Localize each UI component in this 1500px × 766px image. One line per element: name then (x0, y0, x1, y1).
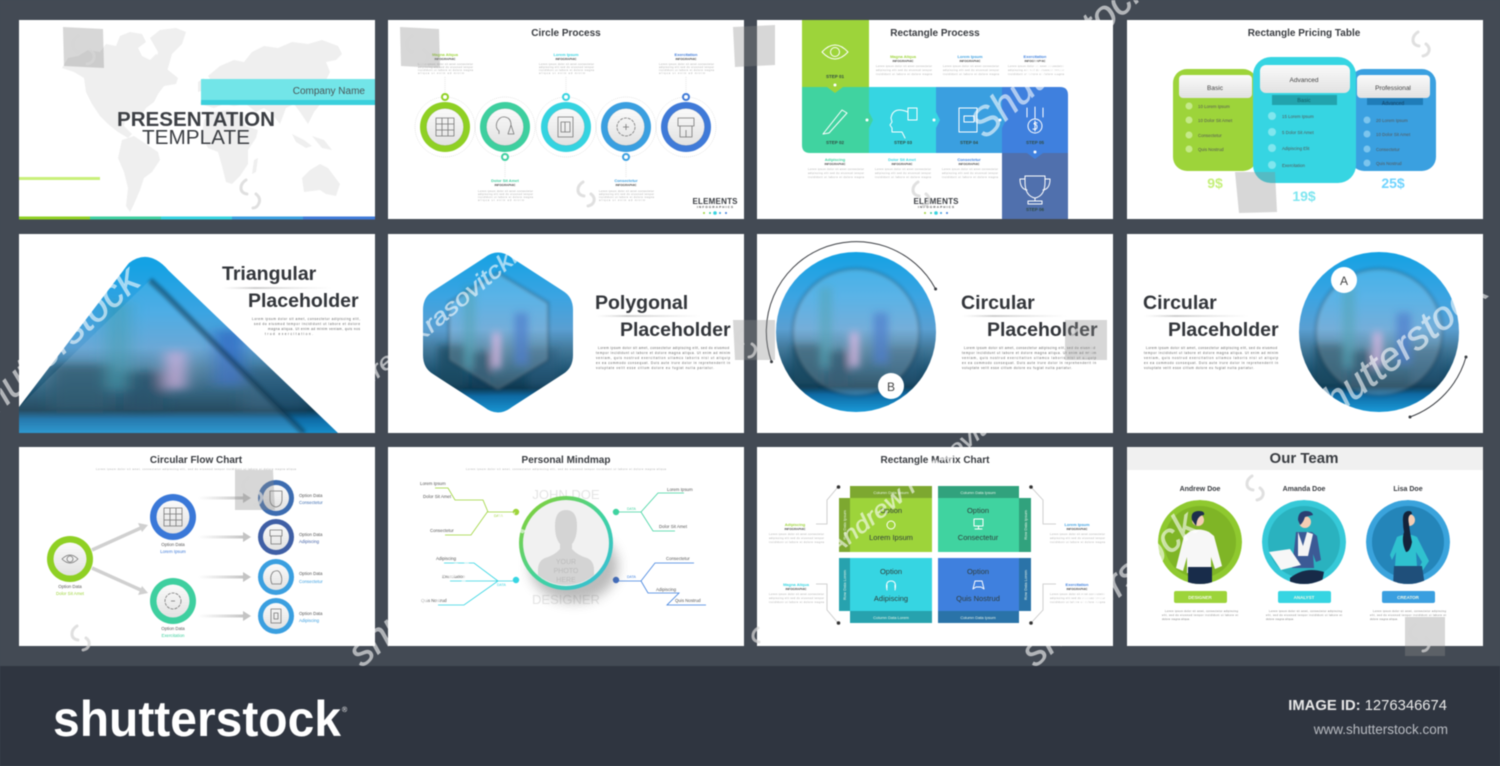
side captions (769, 522, 1106, 604)
badge B: B (887, 380, 895, 394)
bottom captions: incididunt ut labore et dolore magna (875, 175, 932, 179)
heading: Circular (961, 292, 1035, 314)
member names: Andrew Doe (1180, 486, 1221, 493)
body text: ex ea commodo consequat. Duis aute irure dolor in reprehenderit in (1144, 361, 1278, 365)
node captions: Consectetur (299, 579, 323, 584)
badge A: A (1340, 274, 1348, 288)
arc arrow (766, 242, 937, 363)
photo circle: PHOTO (554, 568, 579, 575)
matrix tabs: Row Data Ipsum (842, 510, 847, 540)
bottom captions: adipiscing elit sed do eiusmod tempor (942, 171, 998, 175)
branch labels: Adipiscing (436, 556, 457, 561)
watermark squares (63, 25, 1445, 656)
side captions: adipiscing elit sed do eiusmod tempor (769, 596, 824, 600)
matrix tabs: Column Data Ipsum (873, 490, 909, 495)
matrix squares: Consectetur (958, 533, 999, 542)
node captions: Adipiscing (299, 539, 320, 544)
side captions: adipiscing elit sed do eiusmod tempor (1050, 596, 1105, 600)
node captions: Exercitation (162, 633, 185, 638)
bottom captions: adipiscing elit sed do eiusmod tempor (808, 171, 864, 175)
node captions: Lorem Ipsum (160, 549, 186, 554)
advanced card: Basic (1297, 98, 1311, 104)
branch labels: Quis Nostrud (675, 598, 701, 603)
top labels: Lorem ipsum dolor sit amet consectetur (418, 62, 473, 66)
professional card: 10 Dolor Sit Amet (1376, 132, 1411, 137)
bottom labels: incididunt ut labore et dolore magna (478, 195, 534, 199)
step labels: STEP 05 (1026, 140, 1044, 145)
member bios: Lorem ipsum dolor sit amet, consectetur adipiscing (1165, 609, 1239, 613)
member: Lisa (1366, 500, 1450, 586)
body text (252, 317, 360, 336)
side captions: Magna Aliqua (783, 582, 810, 587)
side captions: Lorem ipsum dolor sit amet consectetur (1050, 532, 1105, 536)
top labels: adipiscing elit sed do eiusmod tempor (539, 65, 594, 69)
matrix squares (850, 498, 1019, 611)
body text: veniam, quis nostrud exercitation ullamco laboris nisi ut aliquip (962, 356, 1096, 360)
side captions: Lorem Ipsum (1064, 522, 1090, 527)
title: PRESENTATION (117, 109, 275, 131)
member bios: dolore magna aliqua. (1266, 617, 1294, 621)
basic card: Quis Nostrud (1198, 147, 1224, 152)
body text: voluptate velit esse cillum dolore eu fugiat nulla pariatur. (596, 366, 714, 370)
node captions: Option Data (299, 611, 323, 616)
top captions: Lorem Ipsum (957, 54, 983, 59)
image id: IMAGE ID: 1276346674 (1288, 698, 1447, 714)
body text: tempor incididunt ut labore et dolore magna aliqua. Ut enim ad minim (1144, 351, 1278, 355)
panel: triangular placeholder slide (19, 234, 375, 438)
panel: rectangle pricing table slide (1127, 20, 1483, 219)
panel: rectangle matrix chart slide (757, 447, 1113, 646)
body text: Lorem ipsum dolor sit amet, consectetur adipiscing elit, sed do eiusmod (598, 346, 729, 350)
colour strip (19, 216, 375, 220)
panel: personal mindmap slide (388, 447, 744, 646)
footer logo: shutterstock (53, 691, 341, 747)
top labels: Exercitation (675, 52, 698, 57)
bottom captions: Lorem ipsum dolor sit amet consectetur (942, 167, 998, 171)
heading: Lorem ipsum dolor sit amet, consectetur adipiscing elit, sed do eiusmod tempor incididunt ut labore et dolore magna aliqua (96, 467, 297, 471)
matrix tabs (839, 486, 1031, 623)
heading (595, 292, 731, 341)
side captions: incididunt ut labore et dolore magna (1050, 600, 1106, 604)
top labels: incididunt ut labore et dolore magna (418, 68, 474, 72)
panel: circle process slide (388, 20, 744, 219)
bottom labels: incididunt ut labore et dolore magna (599, 195, 655, 199)
node captions: Consectetur (299, 500, 323, 505)
matrix tabs: Row Data Lorem (842, 569, 847, 600)
bottom captions (808, 157, 999, 179)
member bios: elit, sed do eiusmod tempor incididunt ut labore et (1370, 613, 1446, 617)
side captions: Lorem ipsum dolor sit amet consectetur (769, 532, 824, 536)
photo circle (519, 496, 618, 602)
step labels: STEP 03 (894, 140, 912, 145)
top captions: Magna Aliqua (890, 54, 917, 59)
elements logo: ELEMENTS (692, 197, 738, 206)
bottom labels: adipiscing elit sed do eiusmod tempor (599, 192, 654, 196)
bottom labels: INFOGRAPHIC (494, 183, 516, 187)
bottom labels: Lorem ipsum dolor sit amet consectetur (599, 189, 654, 193)
circular image (776, 252, 936, 412)
prices: 19$ (1292, 188, 1316, 204)
heading: Triangular (222, 263, 317, 285)
role badges: ANALYST (1294, 595, 1315, 600)
photo circle: HERE (556, 577, 576, 584)
body text: ex ea commodo consequat. Duis aute irure dolor in reprehenderit in (596, 361, 730, 365)
node captions: Option Data (299, 493, 323, 498)
top captions: adipiscing elit sed do eiusmod tempor (876, 68, 932, 72)
heading: Rectangle Process (890, 28, 980, 39)
body text: Lorem ipsum dolor sit amet, consectetur adipiscing elit, (252, 317, 360, 321)
watermark text: Shutterstock (1293, 266, 1497, 439)
bottom captions: Lorem ipsum dolor sit amet consectetur (808, 167, 864, 171)
body text (1144, 346, 1278, 370)
photo circle: YOUR (556, 559, 576, 566)
branch labels (420, 481, 701, 603)
side captions: incididunt ut labore et dolore magna (769, 540, 825, 544)
watermark text: Andrew Krasovitckii (820, 391, 1022, 561)
professional card (1350, 69, 1436, 171)
branch labels: Dolor Sit Amet (423, 494, 452, 499)
body text (596, 346, 730, 370)
advanced card (1253, 57, 1356, 183)
matrix tabs: Column Data Lorem (873, 615, 910, 620)
heading: Rectangle Matrix Chart (881, 455, 990, 466)
side captions: incididunt ut labore et dolore magna (769, 600, 825, 604)
top labels: Lorem ipsum dolor sit amet consectetur (659, 62, 714, 66)
branch dots (513, 509, 619, 583)
company name band: Company Name (293, 86, 365, 97)
heading: Personal Mindmap (522, 455, 610, 466)
branch labels: Lorem Ipsum (667, 487, 693, 492)
prices: 9$ (1207, 175, 1223, 191)
top labels: adipiscing elit sed do eiusmod tempor (418, 65, 473, 69)
side captions: Adipiscing (785, 522, 806, 527)
basic card: Basic (1207, 85, 1224, 92)
top labels: aliqua ut enim ad minim (418, 71, 464, 75)
heading (96, 455, 297, 471)
node captions: Dolor Sit Amet (56, 591, 85, 596)
matrix squares: Option (967, 567, 989, 576)
top labels: INFOGRAPHIC (556, 57, 577, 61)
top captions: Exercitation (1024, 54, 1047, 59)
node captions: Adipiscing (299, 618, 320, 623)
step labels: STEP 04 (960, 140, 978, 145)
side captions: adipiscing elit sed do eiusmod tempor (1050, 536, 1105, 540)
badge A (1331, 267, 1357, 293)
side captions: INFOGRAPHIC (1066, 527, 1088, 531)
body text: Lorem ipsum dolor sit amet, consectetur adipiscing elit, sed do eiusmod (964, 346, 1095, 350)
advanced card: Advanced (1290, 77, 1319, 84)
matrix squares: Adipiscing (874, 594, 908, 603)
matrix squares: Option (880, 567, 902, 576)
heading: Rectangle Pricing Table (1248, 28, 1361, 39)
matrix squares: Option (967, 506, 989, 515)
top labels: aliqua ut enim ad minim (659, 71, 705, 75)
top labels: INFOGRAPHIC (676, 57, 697, 61)
top labels: Lorem Ipsum (553, 52, 579, 57)
footer bar (0, 666, 1500, 766)
prices: 25$ (1381, 175, 1405, 191)
green accent line (19, 177, 100, 180)
mind map branches (435, 488, 706, 605)
title (117, 109, 275, 149)
branch labels: Consectetur (430, 528, 454, 533)
branch labels: DATA (497, 583, 506, 587)
side captions: INFOGRAPHIC (1066, 587, 1088, 591)
side captions: adipiscing elit sed do eiusmod tempor (769, 536, 824, 540)
body text: voluptate velit esse cillum dolore eu fugiat nulla pariatur. (962, 366, 1072, 370)
bottom captions: INFOGRAPHIC (892, 162, 913, 166)
top captions: Lorem ipsum dolor sit amet consectetur (1008, 64, 1064, 68)
member: Amanda (1262, 500, 1346, 586)
bottom captions: INFOGRAPHIC (958, 162, 980, 166)
panel: rectangle process slide (757, 20, 1113, 219)
top labels: incididunt ut labore et dolore magna (539, 68, 595, 72)
badge B (878, 373, 904, 399)
step blocks (802, 20, 1068, 219)
side captions: incididunt ut labore et dolore magna (1050, 540, 1106, 544)
advanced card: Adipiscing Elit (1282, 146, 1310, 151)
top captions (876, 54, 1065, 76)
elements logo (692, 197, 738, 215)
registered mark: ® (342, 706, 348, 714)
basic card: 10 Lorem Ipsum (1198, 104, 1230, 109)
heading: Placeholder (987, 319, 1098, 341)
body text: sed do eiusmod tempor incididunt ut labore et dolore (254, 322, 360, 326)
side captions: Exercitation (1066, 582, 1089, 587)
company name band (201, 79, 375, 105)
node captions: Option Data (58, 584, 82, 589)
top captions: Lorem ipsum dolor sit amet consectetur (876, 64, 932, 68)
heading (1143, 292, 1279, 341)
leader dots (837, 485, 1033, 625)
arc arrow (1408, 356, 1468, 418)
header band (1127, 447, 1483, 470)
member bios: elit, sed do eiusmod tempor incididunt ut labore et (1266, 613, 1342, 617)
panel: presentation template slide (19, 20, 375, 220)
top labels: aliqua ut enim ad minim (539, 71, 585, 75)
side captions: INFOGRAPHIC (784, 527, 806, 531)
top captions: incididunt ut labore et dolore magna (876, 72, 933, 76)
top captions: adipiscing elit sed do eiusmod tempor (943, 68, 999, 72)
step labels: STEP 01 (826, 74, 844, 79)
member names: Amanda Doe (1283, 486, 1325, 493)
member names (1180, 486, 1423, 493)
top captions: INFOGRAPHIC (892, 59, 914, 63)
top captions: incididunt ut labore et dolore magna (1008, 72, 1065, 76)
leader lines (816, 487, 1056, 623)
professional card: Consectetur (1376, 147, 1400, 152)
prices (1207, 175, 1405, 204)
top captions: Lorem ipsum dolor sit amet consectetur (943, 64, 999, 68)
node captions: Option Data (161, 626, 185, 631)
elements logo: INFOGRAPHICS (918, 205, 954, 209)
member bios (1162, 609, 1447, 621)
node icons (62, 491, 282, 623)
heading: Placeholder (620, 319, 731, 341)
branch labels: Lorem Ipsum (420, 481, 446, 486)
heading: Circular Flow Chart (150, 455, 243, 466)
body text: veniam, quis nostrud exercitation ullamco laboris nisi ut aliquip (596, 356, 730, 360)
elements logo: INFOGRAPHICS (697, 205, 733, 209)
top labels: Lorem ipsum dolor sit amet consectetur (539, 62, 594, 66)
top labels: Magna Aliqua (432, 52, 459, 57)
top captions: adipiscing elit sed do eiusmod tempor (1008, 68, 1064, 72)
step labels: STEP 06 (1026, 207, 1044, 212)
panel: circular flow chart slide (19, 447, 375, 646)
elements logo (914, 197, 959, 215)
branch labels: Consectetur (666, 556, 690, 561)
triangular image (19, 250, 339, 438)
member names: Lisa Doe (1393, 486, 1423, 493)
bottom labels: aliqua ut enim ad minim (599, 198, 645, 202)
bottom labels: Dolor Sit Amet (491, 178, 519, 183)
bottom captions: Dolor Sit Amet (888, 157, 916, 162)
bottom labels (478, 178, 655, 202)
icons (436, 117, 694, 137)
advanced card: Exercitation (1282, 163, 1305, 168)
top captions: INFOGRAPHIC (960, 59, 981, 63)
professional card: Quis Nostrud (1376, 161, 1402, 166)
heading (466, 455, 667, 471)
matrix squares: Quis Nostrud (956, 594, 1000, 603)
body text: tempor incididunt ut labore et dolore magna aliqua. Ut enim ad minim (596, 351, 730, 355)
member bios: Lorem ipsum dolor sit amet, consectetur adipiscing (1373, 609, 1447, 613)
name ghost text (532, 487, 600, 607)
body text: voluptate velit esse cillum dolore eu fugiat nulla pariatur. (1144, 366, 1254, 370)
circular image (1299, 252, 1459, 412)
top captions: INFOGRAPHIC (1024, 59, 1046, 63)
professional card: Professional (1375, 85, 1411, 92)
heading: Placeholder (248, 290, 359, 312)
branch labels: Exercitation (442, 574, 465, 579)
bottom labels: Consectetur (614, 178, 638, 183)
member bios: dolore magna aliqua. (1162, 617, 1190, 621)
flow nodes (47, 480, 294, 634)
role badges: CREATOR (1397, 595, 1420, 600)
process circles (415, 77, 716, 177)
professional card: Advanced (1382, 101, 1404, 107)
world map (62, 28, 342, 212)
heading (961, 292, 1098, 341)
bottom captions: Lorem ipsum dolor sit amet consectetur (875, 167, 931, 171)
bottom labels: aliqua ut enim ad minim (478, 198, 524, 202)
bottom labels: Lorem ipsum dolor sit amet consectetur (478, 189, 533, 193)
panel: circular placeholder A slide (1127, 234, 1483, 433)
bottom captions: Consectetur (957, 157, 981, 162)
top labels (418, 52, 715, 75)
bottom captions: incididunt ut labore et dolore magna (942, 175, 999, 179)
node captions: Option Data (299, 571, 323, 576)
branch labels: DATA (627, 507, 636, 511)
branch labels: Quis Nostrud (421, 598, 447, 603)
heading: Circular (1143, 292, 1217, 314)
bottom captions: INFOGRAPHIC (824, 162, 846, 166)
heading: Lorem ipsum dolor sit amet, consectetur adipiscing elit, sed do eiusmod tempor incididunt ut labore et dolore magna aliqua (466, 467, 667, 471)
step icons (822, 45, 1050, 204)
heading: Placeholder (1168, 319, 1279, 341)
branch labels: Dolor Sit Amet (659, 524, 688, 529)
top captions: incididunt ut labore et dolore magna (943, 72, 1000, 76)
elements logo: ELEMENTS (914, 197, 959, 206)
branch labels: DATA (494, 514, 503, 518)
node captions: Option Data (161, 542, 185, 547)
top labels: INFOGRAPHIC (434, 57, 456, 61)
matrix tabs: Row Data Ipsum (1023, 510, 1028, 540)
watermark text: shutterstock (340, 501, 535, 675)
member bios: elit, sed do eiusmod tempor incididunt ut labore et (1162, 613, 1238, 617)
advanced card: 5 Dolor Sit Amet (1282, 130, 1315, 135)
matrix tabs: Column Data Ipsum (960, 615, 996, 620)
matrix squares: Lorem Ipsum (869, 533, 913, 542)
side captions: INFOGRAPHIC (786, 587, 807, 591)
basic card: Consectetur (1198, 133, 1222, 138)
bottom captions: incididunt ut labore et dolore magna (808, 175, 865, 179)
role badges: DESIGNER (1188, 595, 1212, 600)
matrix squares: Option (880, 506, 902, 515)
website: www.shutterstock.com (1313, 722, 1448, 737)
name ghost text: JOHN DOE (532, 487, 600, 502)
bottom labels: INFOGRAPHIC (616, 183, 637, 187)
bottom captions: Adipiscing (825, 157, 846, 162)
body text (962, 346, 1096, 370)
panel: our team slide (1127, 447, 1483, 646)
branch labels: DATA (627, 575, 636, 579)
heading: Circle Process (531, 28, 601, 39)
panel: circular placeholder B slide (757, 234, 1113, 433)
member bios: dolore magna aliqua. (1370, 617, 1398, 621)
watermark hooks (72, 32, 1430, 651)
side captions: Lorem ipsum dolor sit amet consectetur (769, 592, 824, 596)
matrix tabs: Column Data Ipsum (960, 490, 996, 495)
body text: ex ea commodo consequat. Duis aute irure dolor in reprehenderit in (962, 361, 1096, 365)
header band: Our Team (1270, 450, 1338, 467)
bottom captions: adipiscing elit sed do eiusmod tempor (875, 171, 931, 175)
watermark text: shutterstock (1013, 501, 1208, 675)
hexagon image (423, 251, 573, 414)
title: TEMPLATE (142, 127, 250, 149)
top labels: adipiscing elit sed do eiusmod tempor (659, 65, 714, 69)
panel: polygonal placeholder slide (388, 234, 744, 433)
member bios: Lorem ipsum dolor sit amet, consectetur adipiscing (1269, 609, 1343, 613)
basic card (1173, 69, 1257, 171)
heading: Polygonal (595, 292, 688, 314)
member: Andrew (1158, 500, 1242, 587)
body text: veniam, quis nostrud exercitation ullamco laboris nisi ut aliquip (1144, 356, 1278, 360)
basic card: 10 Dolor Sit Amet (1198, 118, 1233, 123)
top labels: incididunt ut labore et dolore magna (659, 68, 715, 72)
flow arrows (92, 493, 251, 621)
step labels: STEP 02 (826, 140, 844, 145)
side captions: Lorem ipsum dolor sit amet consectetur (1050, 592, 1105, 596)
body text: Lorem ipsum dolor sit amet, consectetur adipiscing elit, sed do eiusmod (1146, 346, 1277, 350)
node captions: Option Data (299, 532, 323, 537)
body text: tempor incididunt ut labore et dolore magna aliqua. Ut enim ad minim (962, 351, 1096, 355)
watermark text: Andrew Krasovitckii (325, 239, 528, 415)
bottom labels: adipiscing elit sed do eiusmod tempor (478, 192, 533, 196)
role badges (1174, 591, 1435, 603)
advanced card: 15 Lorem Ipsum (1282, 114, 1314, 119)
step labels (826, 74, 1044, 212)
body text: trud exercitation. (265, 332, 313, 336)
branch labels: Adipiscing (656, 587, 677, 592)
name ghost text: DESIGNER (532, 592, 600, 607)
heading (222, 263, 359, 312)
professional card: 20 Lorem Ipsum (1376, 118, 1408, 123)
body text: magna aliqua. Ut enim ad minim veniam, quis nos (268, 327, 360, 331)
matrix tabs: Row Data Lorem (1023, 569, 1028, 600)
node captions (56, 493, 323, 638)
